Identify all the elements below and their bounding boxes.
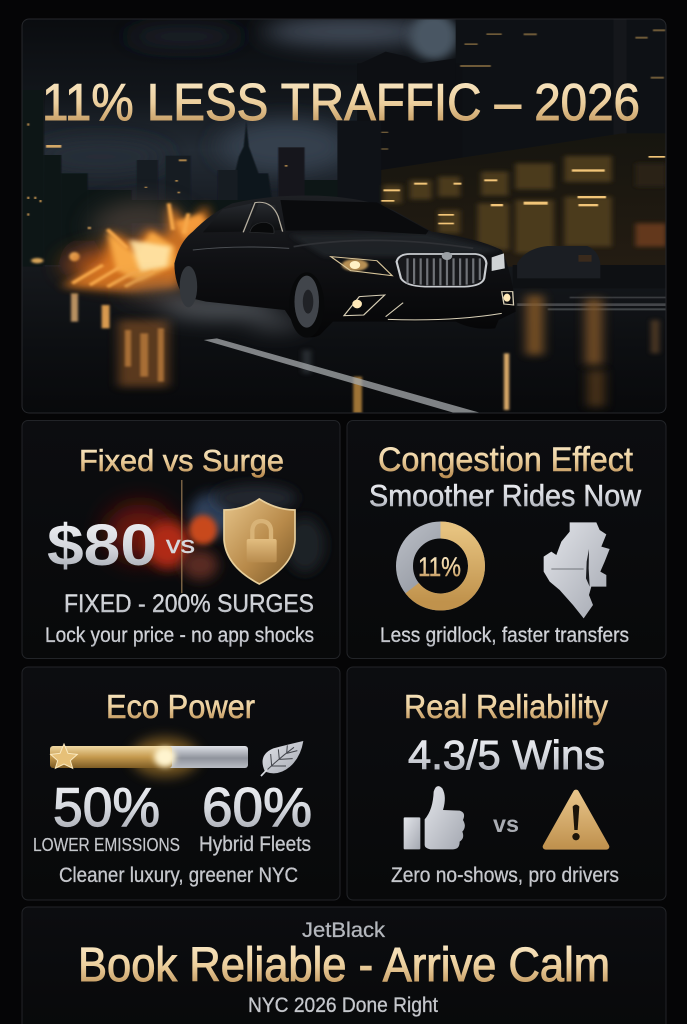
donut chart: 11% (404, 530, 477, 602)
night sky (22, 20, 456, 267)
right headlight (492, 253, 505, 271)
label: lower emissions: LOWER EMISSIONS (33, 835, 180, 855)
panel: eco power (22, 667, 340, 900)
skyline lights (27, 123, 287, 229)
rear side windows (203, 203, 252, 232)
flames behind the car (61, 200, 211, 292)
icon: silver region map (544, 522, 610, 618)
panel: real reliability (347, 667, 666, 900)
title: 11% LESS TRAFFIC – 2026 (42, 74, 640, 132)
caption: Zero no-shows, pro drivers (391, 864, 619, 887)
fixed vs surges label: FIXED - 200% SURGES (64, 590, 314, 618)
panel: call to action footer (22, 907, 666, 1024)
star marker (51, 744, 77, 768)
road reflections (71, 293, 659, 413)
icon: warning triangle (546, 793, 606, 847)
lit building facade (381, 133, 670, 270)
heading: Congestion Effect (378, 441, 634, 479)
distant skyline (22, 103, 338, 266)
price: $80: $80 (47, 513, 157, 578)
lane marking (204, 338, 482, 413)
car in background left (30, 241, 96, 265)
heading: Fixed vs Surge (79, 443, 284, 478)
heading: Eco Power (106, 688, 255, 725)
explosion background (106, 480, 325, 593)
front wheel (291, 274, 319, 338)
hood sheen (289, 233, 500, 257)
car in background right (517, 246, 600, 278)
windshield (280, 200, 429, 234)
fog lights and lip (344, 292, 514, 320)
wet road (22, 265, 666, 384)
brand name: JetBlack (302, 919, 386, 942)
icon: thumbs up (404, 786, 465, 849)
road spray (123, 285, 302, 330)
caption: Cleaner luxury, greener NYC (59, 864, 298, 887)
main black sedan (174, 195, 516, 338)
side reflection (193, 247, 289, 250)
call to action headline: Book Reliable - Arrive Calm (78, 939, 610, 992)
rear wheel (180, 266, 197, 307)
caption: Lock your price - no app shocks (45, 624, 314, 647)
panel: fixed vs surge (22, 420, 340, 658)
vs: vs (166, 532, 195, 559)
right towers (337, 20, 666, 204)
progress bar (50, 737, 248, 777)
heading: Real Reliability (404, 688, 608, 725)
donut chart: 11%: 11% (418, 552, 461, 582)
vs: vs (493, 811, 519, 837)
panel: congestion effect (347, 420, 666, 658)
label: hybrid fleets: Hybrid Fleets (199, 833, 311, 856)
rating: 4.3/5 Wins (408, 732, 605, 778)
icon: gold shield with lock (224, 499, 295, 584)
side mirror (250, 222, 274, 233)
left headlight (331, 257, 392, 276)
stat: 60%: 60% (202, 776, 312, 838)
chrome window trim (243, 202, 283, 232)
tagline: NYC 2026 Done Right (248, 994, 438, 1017)
subheading: Smoother Rides Now (369, 478, 642, 513)
caption: Less gridlock, faster transfers (380, 624, 629, 647)
panel: hero image (18, 13, 670, 417)
icon: silver leaf (261, 741, 303, 776)
stat: 50%: 50% (53, 776, 160, 838)
grille (397, 252, 486, 287)
